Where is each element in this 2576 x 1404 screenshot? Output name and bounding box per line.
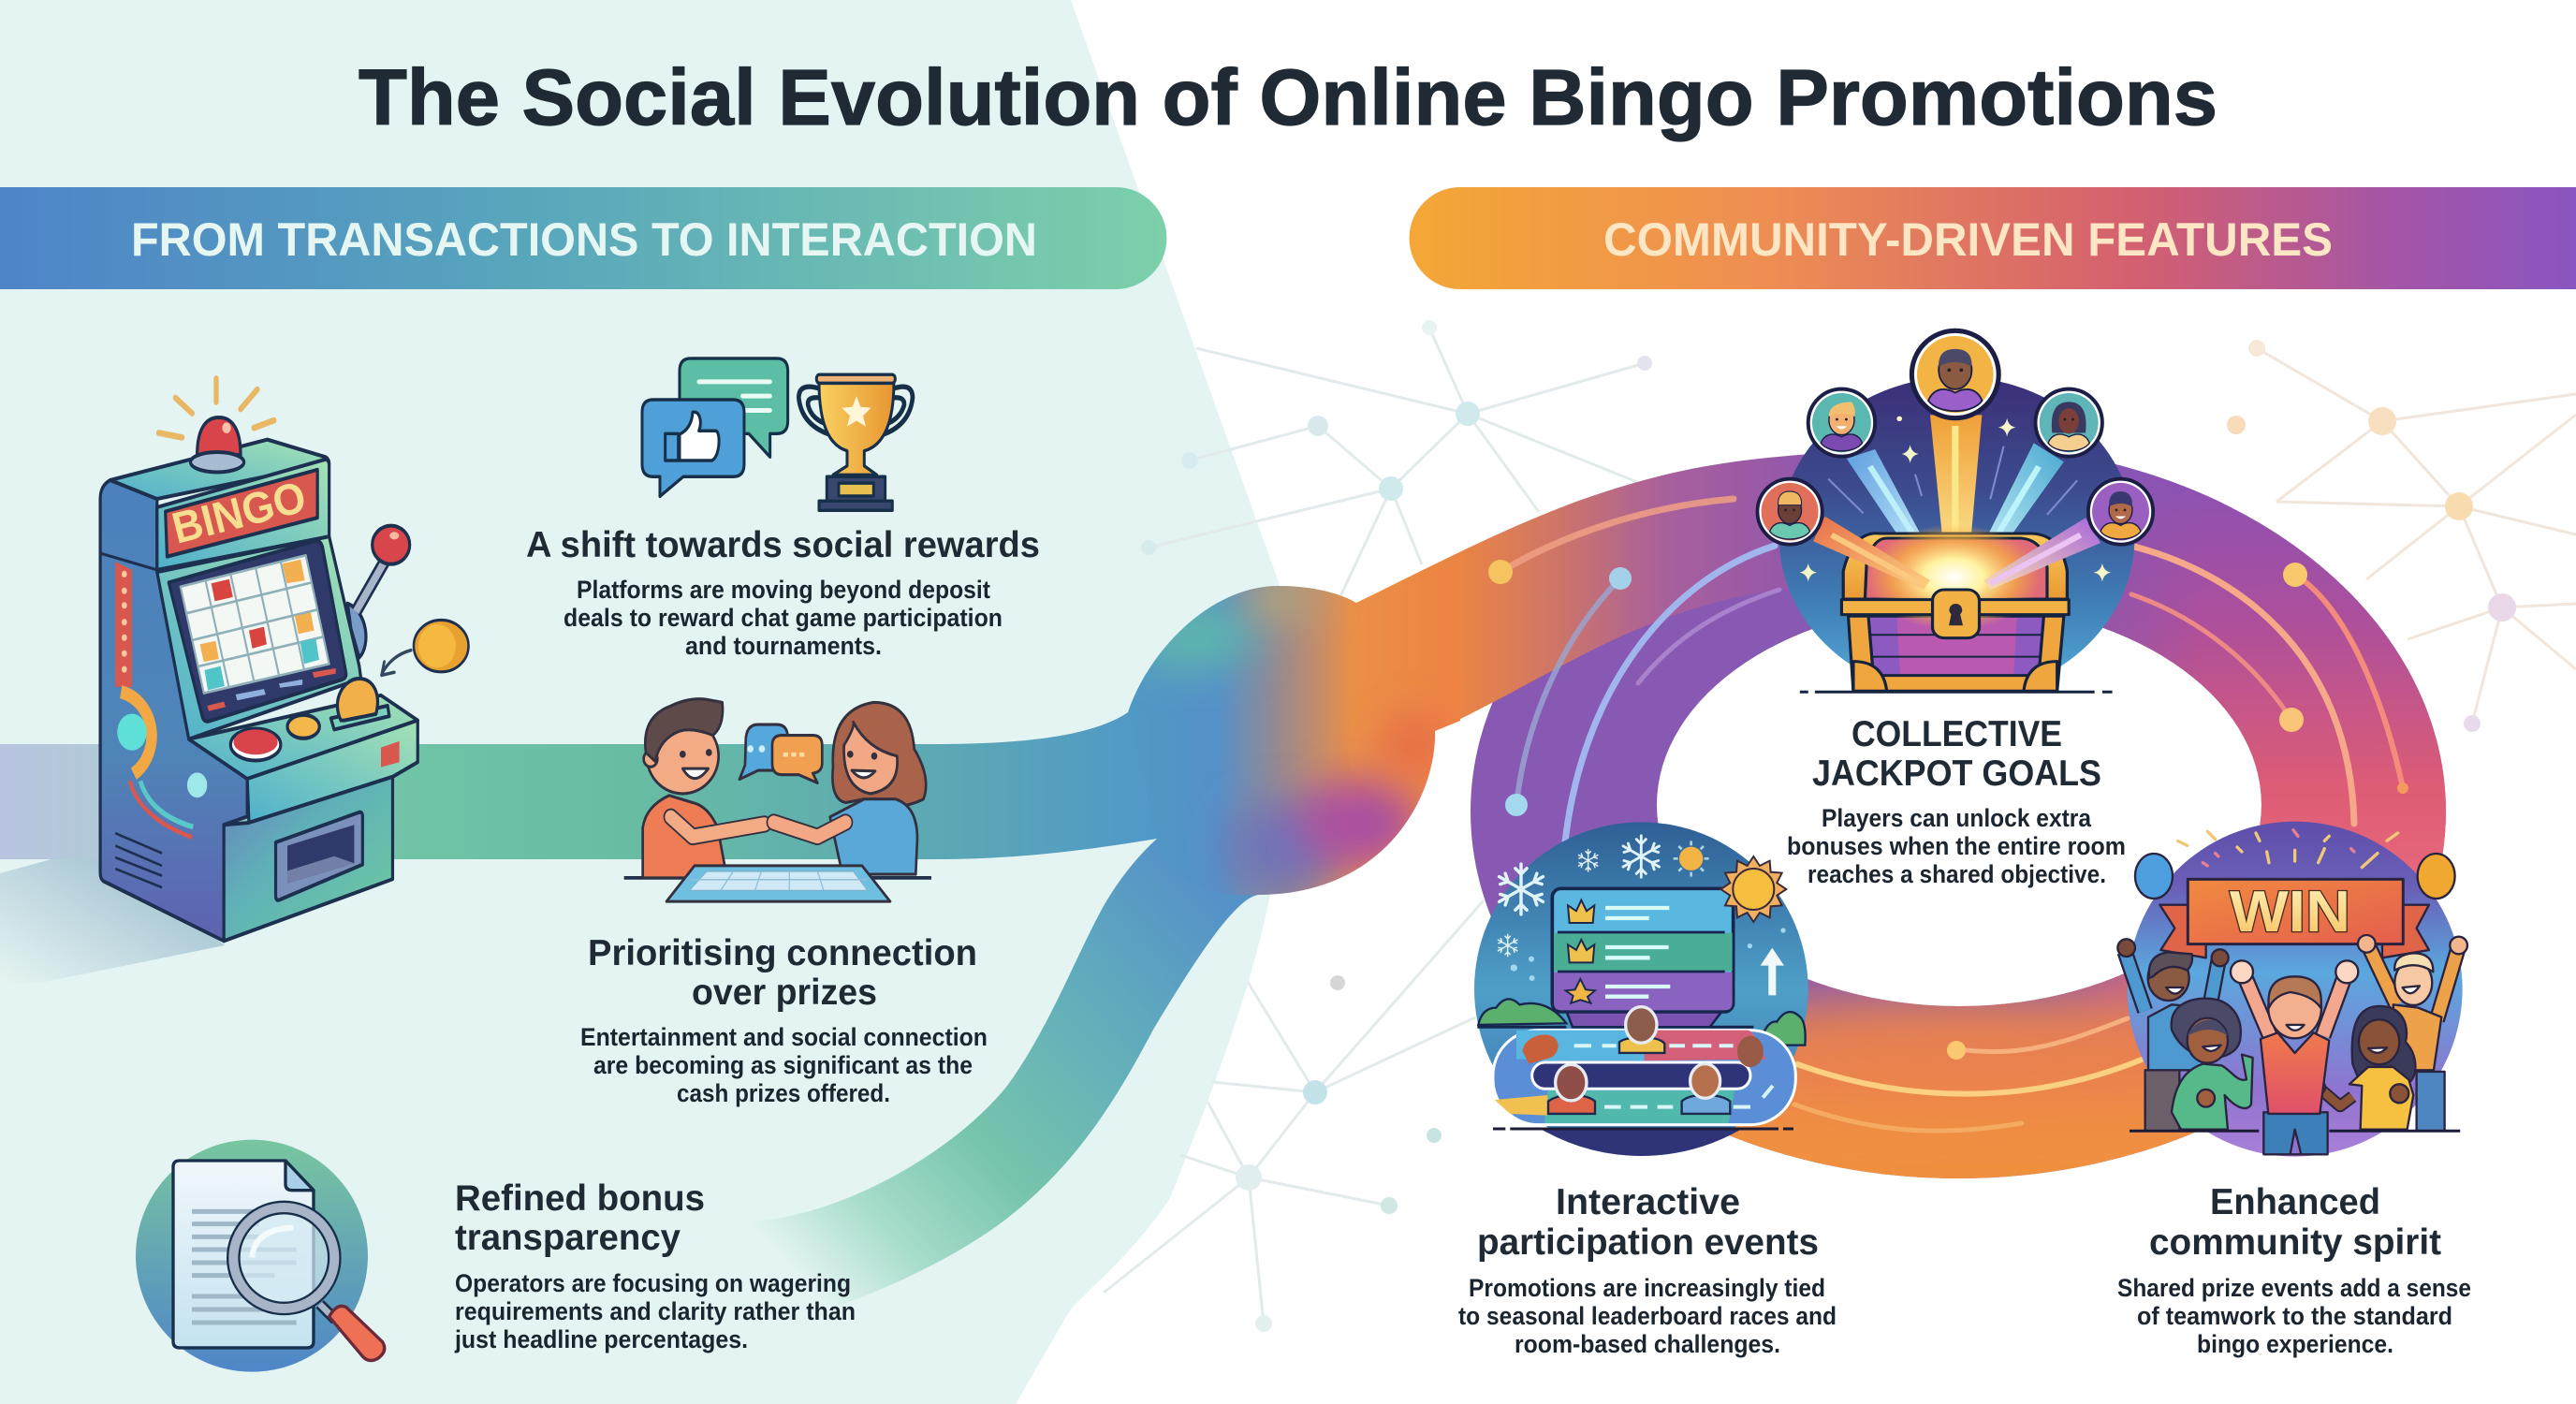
icon: bingo arcade machine: BINGO <box>167 472 311 553</box>
heading: a shift towards social rewards: A shift towards social rewards <box>526 525 1040 565</box>
text: social rewards description <box>564 576 1003 660</box>
text: connection description: cash prizes offered. <box>677 1079 890 1107</box>
heading: refined bonus transparency: Refined bonus <box>455 1178 705 1219</box>
community ring <box>1471 464 2446 1178</box>
background: mint left panel <box>0 0 1296 1404</box>
heading: enhanced community spirit <box>2149 1182 2441 1263</box>
icon: two players shaking hands over a bingo board <box>624 699 931 901</box>
avatar: upper right player <box>2035 389 2102 457</box>
text: connection description: are becoming as significant as the <box>593 1051 973 1079</box>
person: back left <box>2117 939 2229 1131</box>
text: transparency description <box>454 1269 856 1353</box>
heading: prioritising connection over prizes: over prizes <box>692 973 877 1013</box>
heading: enhanced community spirit: community spirit <box>2149 1222 2441 1263</box>
heading: collective jackpot goals: JACKPOT GOALS <box>1812 753 2101 794</box>
icon: celebrating group with win banner <box>2117 822 2467 1157</box>
person: front left <box>2172 999 2253 1130</box>
machine floor shadow <box>0 846 225 983</box>
text: transparency description: Operators are focusing on wagering <box>455 1269 851 1297</box>
section band: community-driven features <box>1410 187 2576 289</box>
banner text: win: WIN <box>2230 880 2350 944</box>
section band: from transactions to interaction <box>0 187 1166 289</box>
text: jackpot description: bonuses when the entire room <box>1787 832 2126 860</box>
icon: bingo arcade machine <box>100 378 469 941</box>
flow: lower stream <box>749 824 1258 1334</box>
heading: collective jackpot goals: COLLECTIVE <box>1852 714 2062 754</box>
ring streak lines and dots <box>1488 499 2408 1131</box>
text: community spirit description: of teamwork to the standard <box>2137 1302 2452 1330</box>
text: transparency description: requirements and clarity rather than <box>455 1297 856 1325</box>
heading: collective jackpot goals <box>1812 714 2101 794</box>
section band: community-driven features: COMMUNITY-DRIVEN FEATURES <box>1603 213 2333 266</box>
text: social rewards description: Platforms are moving beyond deposit <box>577 576 990 604</box>
network: faint background links upper centre <box>1141 320 1652 596</box>
avatar: right player <box>2088 479 2153 545</box>
heading: interactive participation events: participation events <box>1477 1222 1819 1263</box>
trophy <box>798 374 913 510</box>
heading: interactive participation events <box>1477 1182 1819 1263</box>
person: front right <box>2311 1006 2415 1130</box>
text: jackpot description: reaches a shared objective. <box>1808 860 2106 888</box>
avatar: top player <box>1911 330 1998 418</box>
icon: treasure chest with player avatars <box>1757 330 2153 696</box>
title: The Social Evolution of Online Bingo Promotions <box>359 53 2217 141</box>
heading: prioritising connection over prizes <box>588 933 977 1013</box>
section band: from transactions to interaction: FROM TRANSACTIONS TO INTERACTION <box>131 213 1037 266</box>
text: jackpot description <box>1787 804 2126 888</box>
avatar: upper left player <box>1808 389 1875 457</box>
icon: chat bubbles and trophy <box>642 358 913 510</box>
chest <box>1843 534 2067 691</box>
text: social rewards description: deals to reward chat game participation <box>564 604 1003 632</box>
text: connection description <box>580 1023 988 1107</box>
person: front centre <box>2231 960 2358 1154</box>
text: transparency description: just headline percentages. <box>454 1325 748 1353</box>
network: faint background links right <box>2227 340 2576 732</box>
flow: colour hub <box>1128 586 1460 895</box>
icon: document under magnifying glass <box>136 1140 385 1372</box>
heading: refined bonus transparency <box>455 1178 705 1258</box>
flow: arm from hub to ring <box>1356 453 1825 731</box>
text: participation description: room-based challenges. <box>1515 1330 1780 1358</box>
text: participation description: to seasonal leaderboard races and <box>1458 1302 1837 1330</box>
flow: middle stream <box>0 712 1217 859</box>
text: participation description <box>1458 1274 1837 1358</box>
text: connection description: Entertainment and social connection <box>580 1023 988 1051</box>
avatar: left player <box>1757 479 1822 545</box>
network: faint background links lower centre <box>1104 900 1484 1332</box>
icon: seasonal leaderboard with race track <box>1474 822 1808 1156</box>
text: jackpot description: Players can unlock extra <box>1822 804 2092 832</box>
text: social rewards description: and tournaments. <box>685 632 882 660</box>
heading: interactive participation events: Interactive <box>1556 1182 1740 1222</box>
heading: refined bonus transparency: transparency <box>455 1218 681 1258</box>
heading: prioritising connection over prizes: Prioritising connection <box>588 933 977 973</box>
text: community spirit description <box>2117 1274 2471 1358</box>
text: community spirit description: bingo experience. <box>2197 1330 2393 1358</box>
text: participation description: Promotions are increasingly tied <box>1469 1274 1825 1302</box>
heading: enhanced community spirit: Enhanced <box>2210 1182 2380 1222</box>
chat bubbles <box>642 358 788 496</box>
text: community spirit description: Shared prize events add a sense <box>2117 1274 2471 1302</box>
person: back right <box>2358 935 2467 1131</box>
